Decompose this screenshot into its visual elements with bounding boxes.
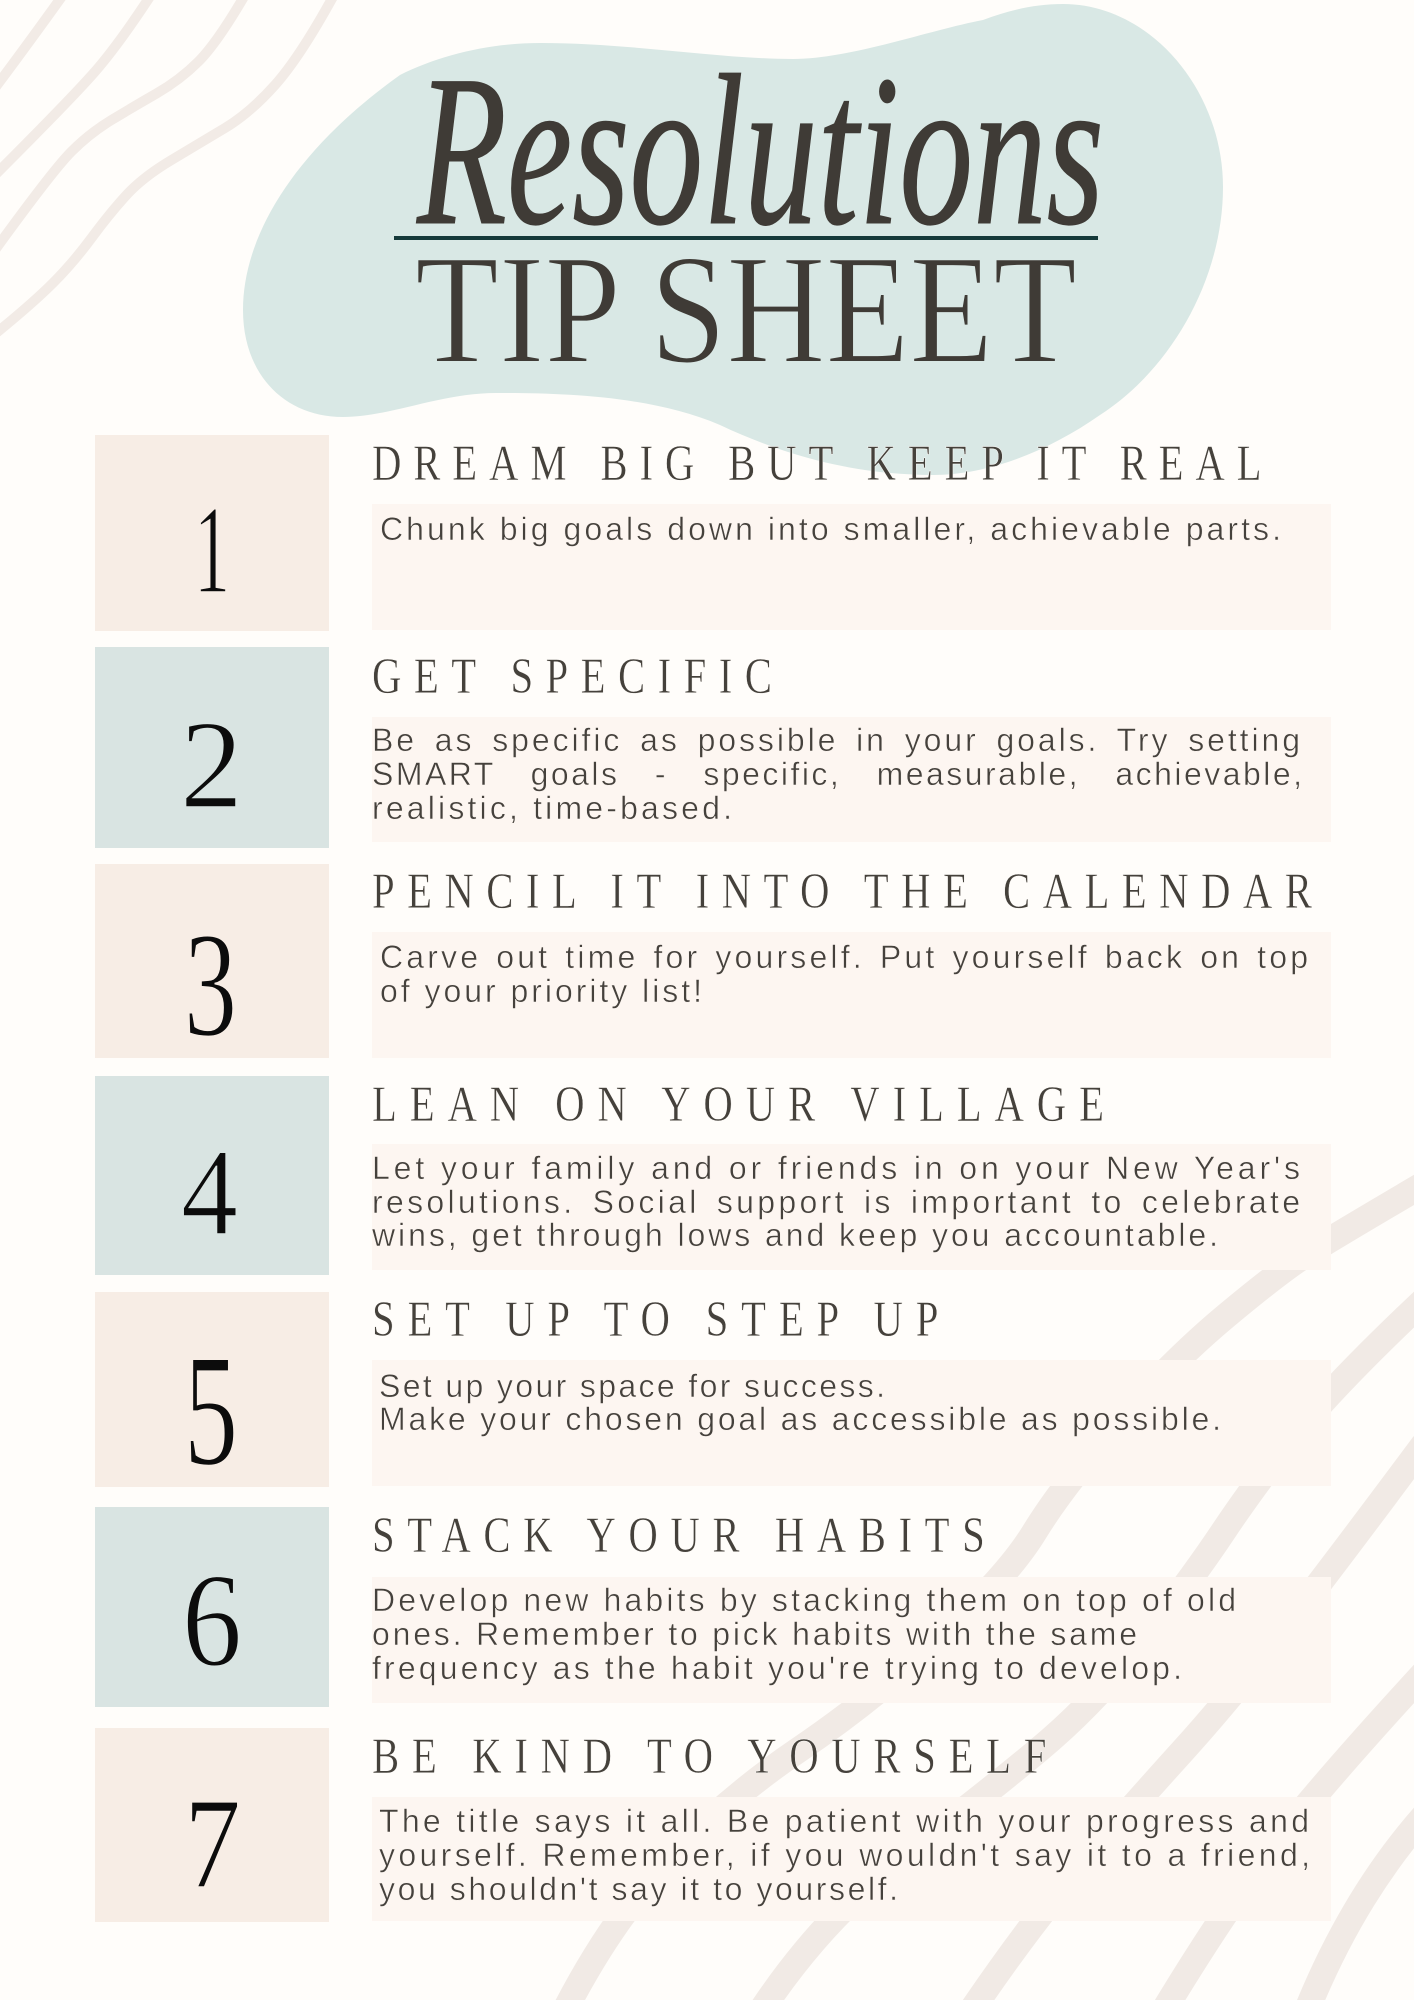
- number tile 7: 7: [184, 1772, 241, 1916]
- number tile 7: [95, 1728, 329, 1922]
- description 2: [372, 717, 1331, 842]
- heading 4: LEAN ON YOUR VILLAGE: [372, 1076, 1104, 1132]
- description 7: The title says it all. Be patient with your progress and: [379, 1803, 1309, 1839]
- number tile 5: 5: [184, 1321, 238, 1499]
- number tile 4: 4: [181, 1124, 238, 1261]
- header blob: [243, 4, 1223, 475]
- tip 4: [95, 1076, 1331, 1275]
- tip 5: [95, 1291, 1331, 1499]
- description 7: you shouldn't say it to yourself.: [379, 1871, 898, 1907]
- heading 3: PENCIL IT INTO THE CALENDAR: [372, 863, 1312, 919]
- description 2: realistic, time-based.: [372, 790, 732, 826]
- description 3: Carve out time for yourself. Put yourself back on top: [380, 939, 1308, 975]
- tip 6: [95, 1507, 1331, 1707]
- number tile 1: 1: [194, 481, 230, 620]
- description 6: ones. Remember to pick habits with the same: [372, 1616, 1137, 1652]
- description 6: [372, 1577, 1331, 1703]
- description 5: Set up your space for success.: [379, 1368, 885, 1404]
- description 4: resolutions. Social support is important to celebrate: [372, 1184, 1300, 1220]
- title script word: Resolutions: [416, 31, 1104, 270]
- tip 2: [95, 647, 1331, 848]
- description 3: [372, 932, 1331, 1058]
- number tile 6: 6: [182, 1546, 242, 1694]
- description 4: [371, 1144, 1331, 1270]
- description 2: SMART goals - specific, measurable, achievable,: [372, 756, 1302, 792]
- tip 7: [95, 1728, 1331, 1922]
- description 7: yourself. Remember, if you wouldn't say it to a friend,: [379, 1837, 1310, 1873]
- title: [394, 31, 1104, 396]
- description 1: [372, 504, 1331, 630]
- title underline: [394, 236, 1098, 240]
- description 3: of your priority list!: [380, 973, 702, 1009]
- heading 2: GET SPECIFIC: [372, 648, 772, 704]
- description 6: Develop new habits by stacking them on top of old: [372, 1582, 1236, 1618]
- description 1: Chunk big goals down into smaller, achievable parts.: [380, 511, 1281, 547]
- heading 1: DREAM BIG BUT KEEP IT REAL: [372, 435, 1262, 491]
- tip 1: [95, 435, 1331, 631]
- number tile 5: [95, 1292, 329, 1499]
- description 4: Let your family and or friends in on your New Year's: [372, 1150, 1300, 1186]
- description 6: frequency as the habit you're trying to develop.: [372, 1650, 1182, 1686]
- description 7: [372, 1797, 1331, 1921]
- number tile 2: 2: [180, 696, 243, 835]
- description 5: [372, 1360, 1331, 1486]
- heading 5: SET UP TO STEP UP: [372, 1291, 938, 1347]
- description 2: Be as specific as possible in your goals. Try setting: [372, 722, 1300, 758]
- tip 3: [95, 863, 1331, 1068]
- heading 7: BE KIND TO YOURSELF: [372, 1728, 1046, 1784]
- heading 6: STACK YOUR HABITS: [372, 1507, 985, 1563]
- description 5: Make your chosen goal as accessible as possible.: [379, 1401, 1221, 1437]
- number tile 3: 3: [184, 902, 237, 1068]
- number tile 6: [95, 1507, 329, 1707]
- number tile 3: [95, 864, 329, 1068]
- number tile 4: [95, 1076, 329, 1275]
- description 4: wins, get through lows and keep you accountable.: [371, 1217, 1218, 1253]
- title subtitle: TIP SHEET: [415, 222, 1077, 396]
- number tile 1: [95, 435, 329, 631]
- number tile 2: [95, 647, 329, 848]
